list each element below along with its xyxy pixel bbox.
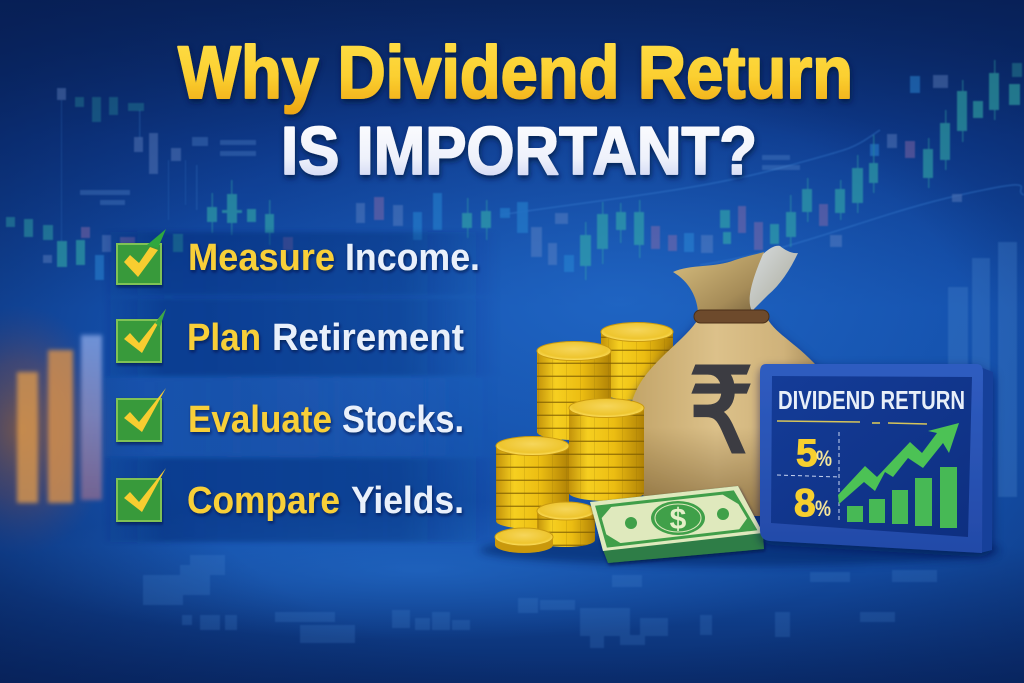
bar chart bbox=[847, 467, 957, 528]
yellow rule bbox=[777, 421, 927, 424]
bag top fabric right bbox=[750, 246, 798, 311]
title bbox=[178, 31, 853, 189]
text 4 bbox=[187, 480, 464, 522]
dashed dividers bbox=[777, 432, 839, 520]
item: plan retirement bbox=[117, 309, 464, 362]
coin stack: back bbox=[601, 322, 673, 400]
item: measure income bbox=[117, 229, 480, 284]
value: 8%: % bbox=[815, 496, 831, 521]
text 1 bbox=[188, 237, 480, 279]
money illustration bbox=[480, 246, 1000, 566]
coin stack: front middle bbox=[569, 398, 644, 501]
title line 1: Why Dividend Return bbox=[178, 31, 853, 114]
title line 2: IS IMPORTANT? bbox=[281, 113, 757, 189]
text 4: Compare bbox=[187, 480, 340, 522]
text 3: Evaluate bbox=[188, 399, 332, 441]
panel frame bbox=[760, 364, 993, 553]
note corners bbox=[597, 492, 755, 546]
banknote stack bbox=[590, 486, 764, 563]
text 2: Retirement bbox=[272, 317, 464, 359]
checkbox 3 bbox=[117, 388, 166, 441]
text 2: Plan bbox=[187, 317, 261, 359]
item: evaluate stocks bbox=[117, 388, 464, 441]
text 1: Income. bbox=[345, 237, 480, 279]
dollar seal bbox=[651, 501, 705, 536]
panel title: DIVIDEND RETURN bbox=[778, 385, 965, 415]
text 2 bbox=[187, 317, 464, 359]
checkbox 4 bbox=[117, 468, 166, 521]
text 3 bbox=[188, 399, 464, 441]
row bands bbox=[105, 232, 500, 542]
bag top fabric left bbox=[673, 252, 764, 312]
panel screen bbox=[771, 376, 972, 537]
coin stack: tall left bbox=[537, 342, 611, 440]
faded bars: right bbox=[948, 242, 1017, 497]
ground shadow bbox=[480, 534, 1000, 566]
single coin bbox=[495, 528, 553, 553]
faded chart pattern on floor bbox=[143, 555, 937, 648]
candlestick chart backdrop bbox=[6, 60, 1024, 280]
coin stack: small bbox=[537, 502, 595, 547]
faded dotted labels bbox=[80, 137, 800, 205]
dividend return panel bbox=[760, 364, 993, 553]
checklist bbox=[105, 229, 500, 542]
coin stack: left low bbox=[496, 436, 569, 529]
rupee symbol: ₹ bbox=[688, 346, 754, 478]
value: 5%: % bbox=[816, 446, 832, 471]
text 1: Measure bbox=[188, 237, 335, 279]
value: 5%: 5 bbox=[796, 432, 818, 475]
checkbox 1 bbox=[117, 229, 166, 284]
growth arrow bbox=[838, 423, 959, 504]
faded bars: left orange bbox=[17, 335, 102, 503]
item: compare yields bbox=[117, 468, 464, 522]
text 4: Yields. bbox=[351, 480, 464, 522]
checkbox 2 bbox=[117, 309, 166, 362]
rope tie bbox=[694, 310, 769, 323]
value: 8%: 8 bbox=[794, 482, 816, 525]
money bag bbox=[630, 246, 822, 516]
value: 8% bbox=[794, 482, 831, 525]
text 3: Stocks. bbox=[342, 399, 464, 441]
bag body bbox=[630, 318, 822, 516]
dollar seal: $ bbox=[670, 503, 687, 536]
value: 5% bbox=[796, 432, 832, 475]
